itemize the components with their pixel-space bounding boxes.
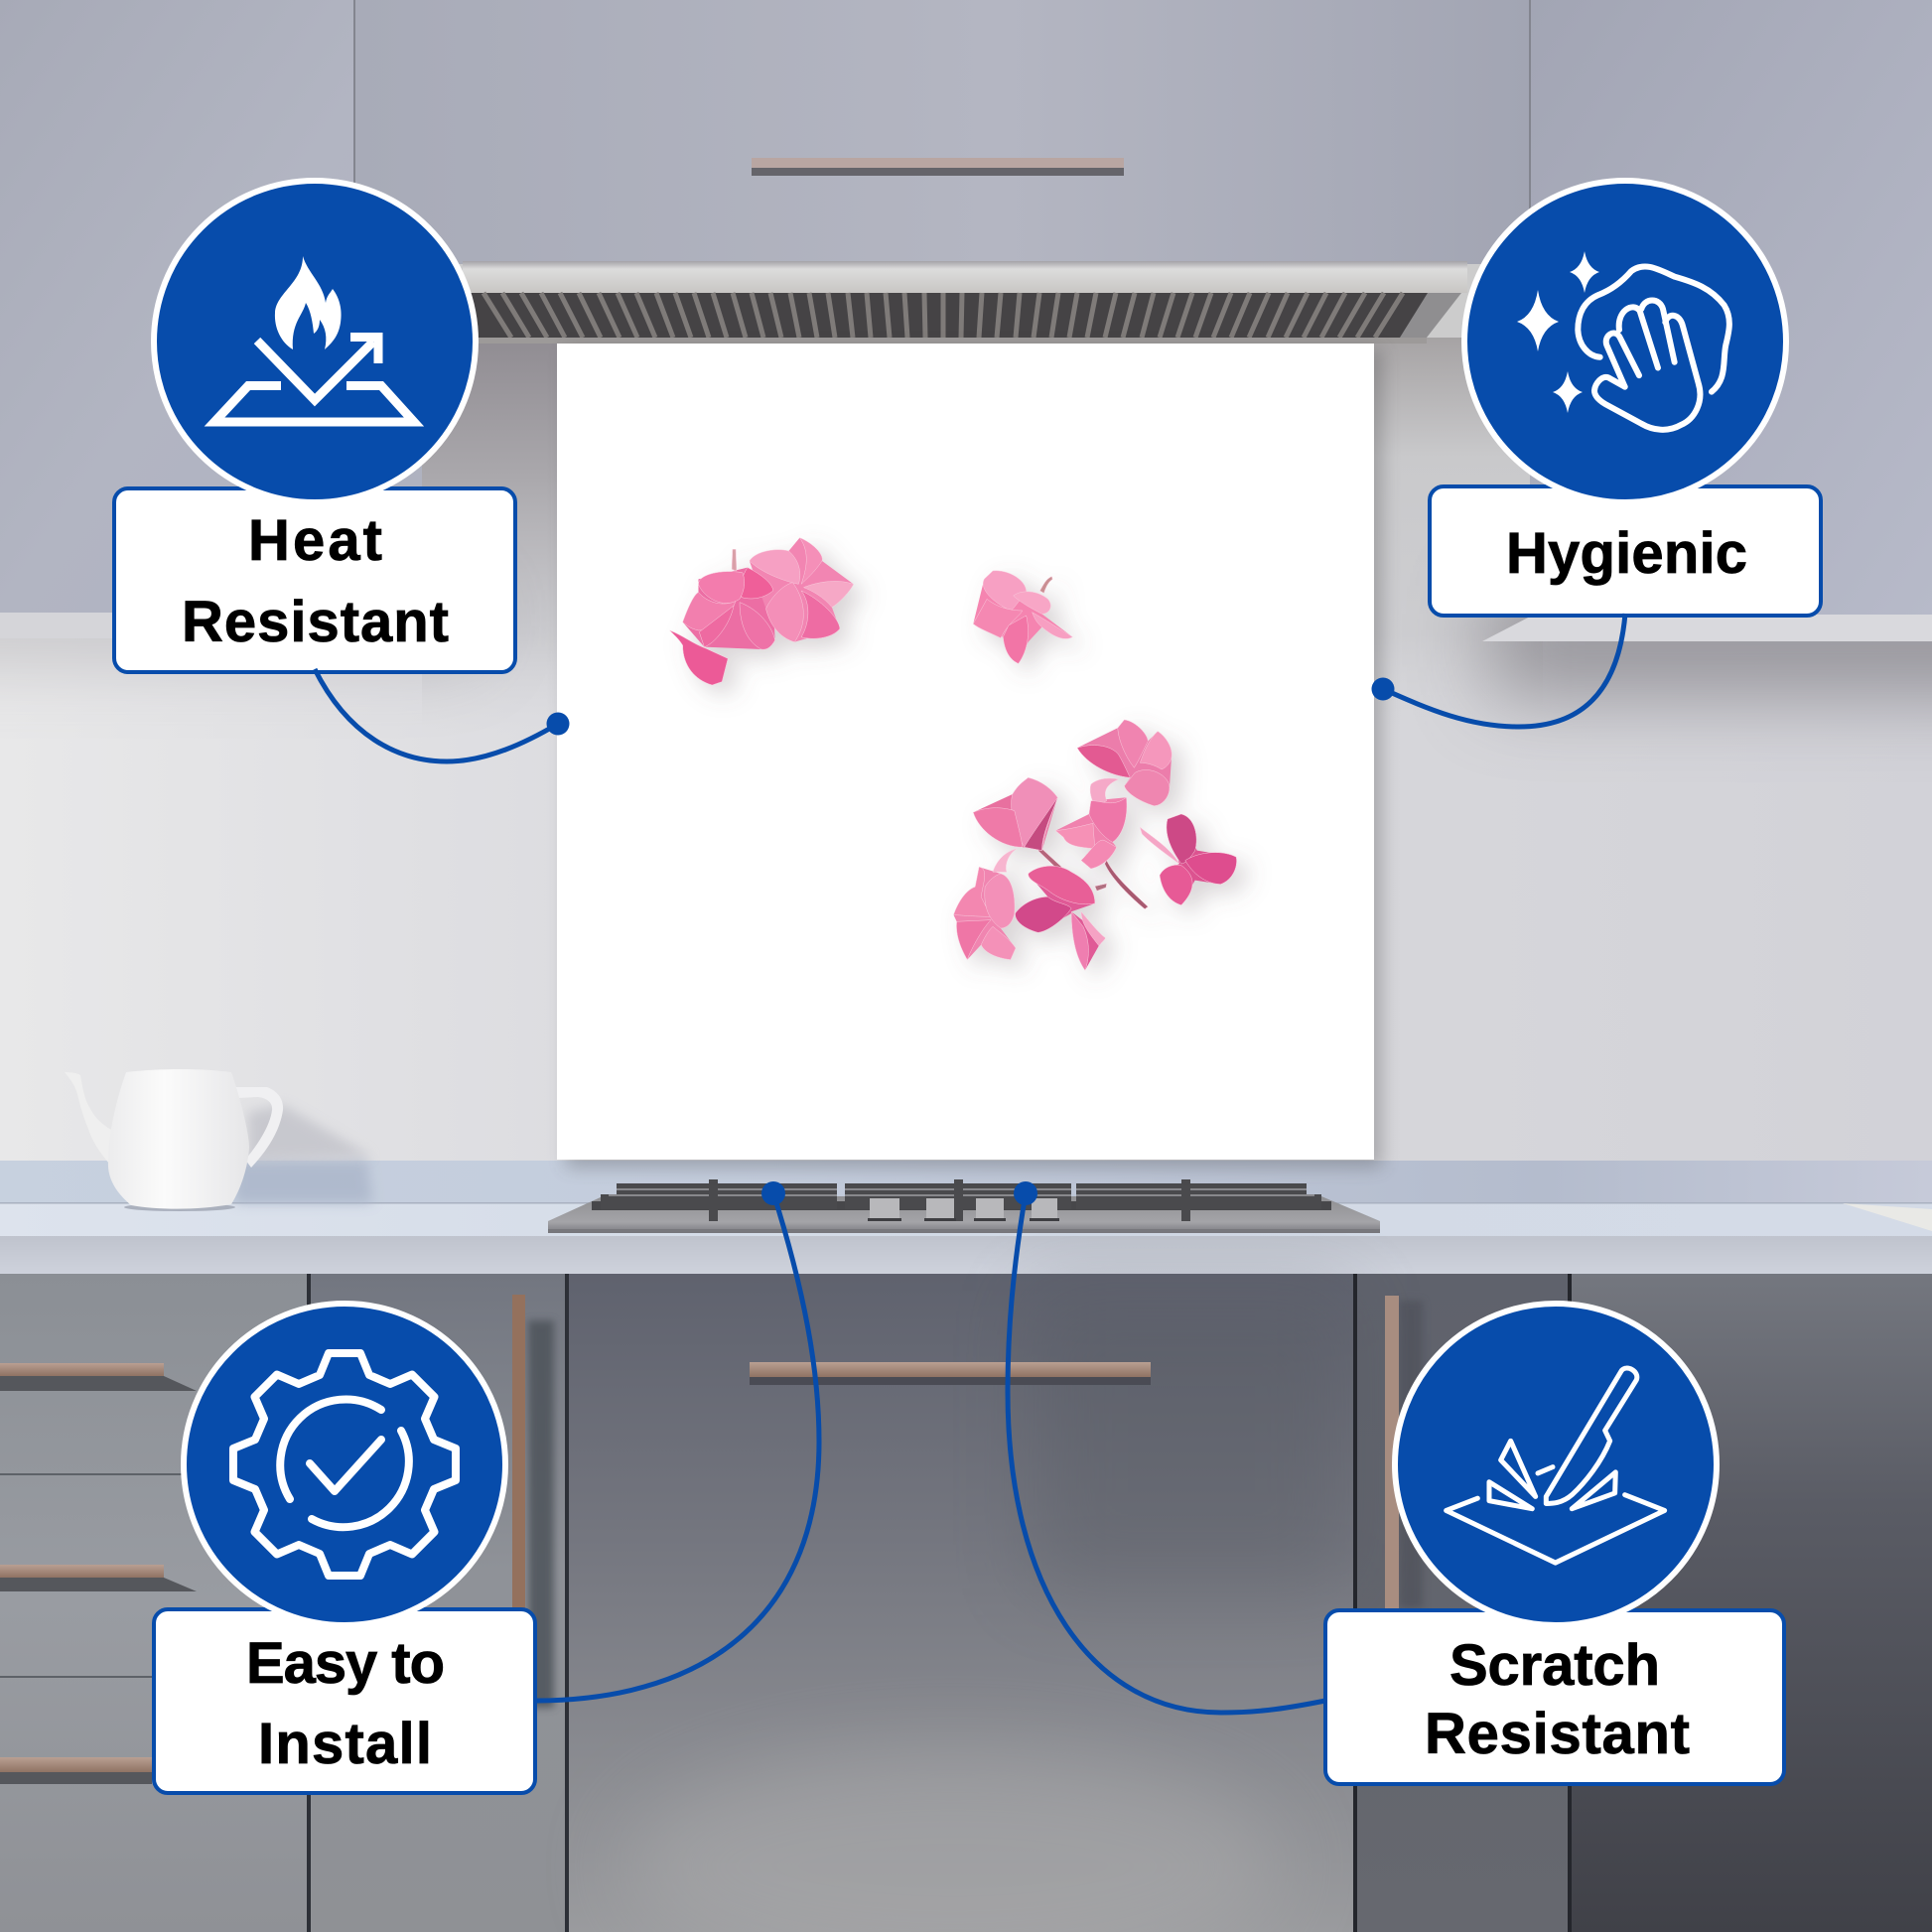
tiled wall	[0, 338, 1932, 1164]
label text: Heat	[248, 508, 382, 573]
icon badge circle	[184, 1304, 505, 1625]
label text: Easy to	[246, 1631, 445, 1696]
pink flowers on panel	[670, 538, 1237, 970]
connector line with dot	[537, 1181, 819, 1701]
label box	[154, 1609, 535, 1793]
label text: Resistant	[1425, 1702, 1690, 1766]
label text: Hygienic	[1506, 521, 1747, 586]
icon: knife scratching a surface	[1447, 1368, 1665, 1563]
countertop	[0, 1161, 1932, 1274]
label text	[182, 508, 449, 654]
label box	[1430, 486, 1821, 616]
label text: Scratch	[1449, 1633, 1660, 1698]
flower: upper centre	[973, 571, 1072, 663]
icon: wiping hand with sparkles	[1517, 251, 1729, 430]
cabinet handles	[0, 158, 1423, 1784]
range hood	[463, 261, 1467, 344]
label box	[114, 488, 515, 672]
label text	[246, 1631, 445, 1776]
connector line with dot	[1372, 614, 1625, 727]
splashback glass panel	[557, 344, 1374, 1160]
icon badge circle	[1395, 1304, 1717, 1625]
gas cooktop	[548, 1179, 1380, 1233]
callout: Heat Resistant	[114, 181, 570, 761]
lower cabinets	[0, 1274, 1932, 1932]
splashback panel shadow	[566, 349, 1382, 1168]
label text: Install	[258, 1712, 432, 1776]
connector line with dot	[315, 669, 570, 761]
label text	[1425, 1633, 1690, 1766]
cabinet underside strips	[0, 613, 1932, 641]
label box	[1325, 1610, 1784, 1784]
upper cabinets	[0, 0, 1932, 616]
callout: Hygienic	[1372, 181, 1821, 727]
callout: Scratch Resistant	[1008, 1181, 1784, 1784]
callout: Easy to Install	[154, 1181, 819, 1793]
flower cluster: upper left	[670, 538, 854, 685]
icon: gear with check mark	[233, 1353, 456, 1576]
label text: Resistant	[182, 590, 449, 654]
icon badge circle	[154, 181, 476, 502]
connector line with dot	[1008, 1181, 1325, 1713]
icon badge circle	[1464, 181, 1786, 502]
teapot	[65, 1069, 372, 1211]
flower cluster: lower right	[954, 720, 1237, 970]
icon: flame on surface with reflecting arrow	[214, 256, 414, 422]
